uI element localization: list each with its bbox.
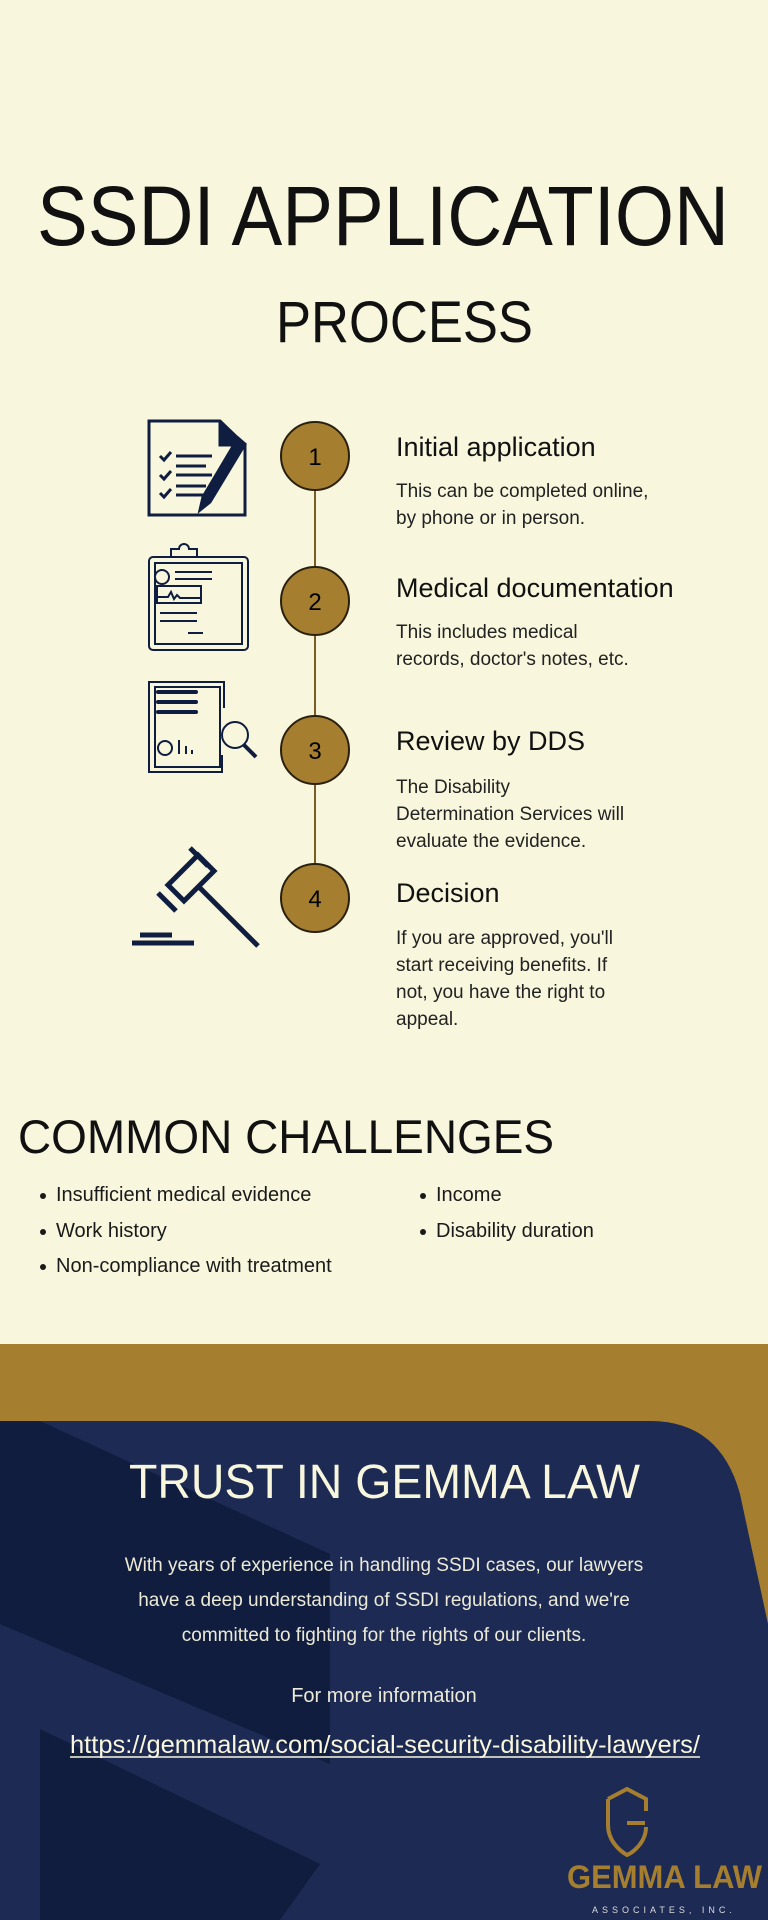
step 4 text: appeal. — [396, 1009, 458, 1030]
step 2 text — [396, 573, 674, 670]
challenges list: Work history — [56, 1220, 167, 1242]
paragraph: With years of experience in handling SSDI cases, our lawyers — [125, 1555, 643, 1576]
heading: trust in gemma law: TRUST IN GEMMA LAW — [129, 1456, 641, 1509]
challenges list: Non-compliance with treatment — [56, 1255, 332, 1277]
step 3 text: Determination Services will — [396, 804, 624, 825]
step circle 4: 4 — [308, 886, 322, 913]
step 4 text: If you are approved, you'll — [396, 928, 613, 949]
title — [37, 170, 729, 350]
challenges list — [40, 1184, 594, 1277]
logo — [567, 1786, 763, 1915]
icon: gavel — [132, 848, 258, 946]
step 1 text: This can be completed online, — [396, 481, 648, 502]
step circle 4 — [281, 864, 349, 932]
step circle 1 — [281, 422, 349, 490]
step 4 text: start receiving benefits. If — [396, 955, 607, 976]
footer background — [0, 1344, 768, 1920]
for more info: For more information — [291, 1685, 477, 1707]
icon: report with magnifier — [149, 682, 256, 772]
step 2 text: Medical documentation — [396, 573, 674, 603]
step 4 text — [396, 878, 613, 1030]
step 4 text: not, you have the right to — [396, 982, 605, 1003]
step 2 text: records, doctor's notes, etc. — [396, 649, 629, 670]
step circle 2 — [281, 567, 349, 635]
paragraph: have a deep understanding of SSDI regulations, and we're — [138, 1590, 630, 1611]
logo: ASSOCIATES, INC. — [592, 1905, 736, 1915]
logo: GEMMA LAW — [567, 1859, 763, 1895]
url: https://gemmalaw.com/social-security-disability-lawyers/ — [70, 1731, 700, 1759]
icon: medical clipboard — [149, 544, 248, 650]
step 3 text — [396, 726, 624, 852]
icon: checklist with pen — [149, 421, 245, 515]
step circle 2: 2 — [308, 589, 322, 616]
step 4 text: Decision — [396, 878, 500, 908]
step 2 text: This includes medical — [396, 622, 578, 643]
paragraph: committed to fighting for the rights of our clients. — [182, 1625, 586, 1646]
challenges list: Insufficient medical evidence — [56, 1184, 311, 1206]
challenges list: Disability duration — [436, 1220, 594, 1242]
step 3 text: The Disability — [396, 777, 510, 798]
step 3 text: Review by DDS — [396, 726, 585, 756]
timeline — [132, 420, 350, 948]
step circle 1: 1 — [308, 444, 322, 471]
step 1 text: Initial application — [396, 432, 596, 462]
step circle 3 — [281, 716, 349, 784]
paragraph — [124, 1555, 643, 1646]
step 1 text — [396, 432, 648, 529]
step 3 text: evaluate the evidence. — [396, 831, 586, 852]
step 1 text: by phone or in person. — [396, 508, 585, 529]
step circle 3: 3 — [308, 738, 322, 765]
challenges list: Income — [436, 1184, 502, 1206]
heading: common challenges: COMMON CHALLENGES — [18, 1110, 554, 1163]
